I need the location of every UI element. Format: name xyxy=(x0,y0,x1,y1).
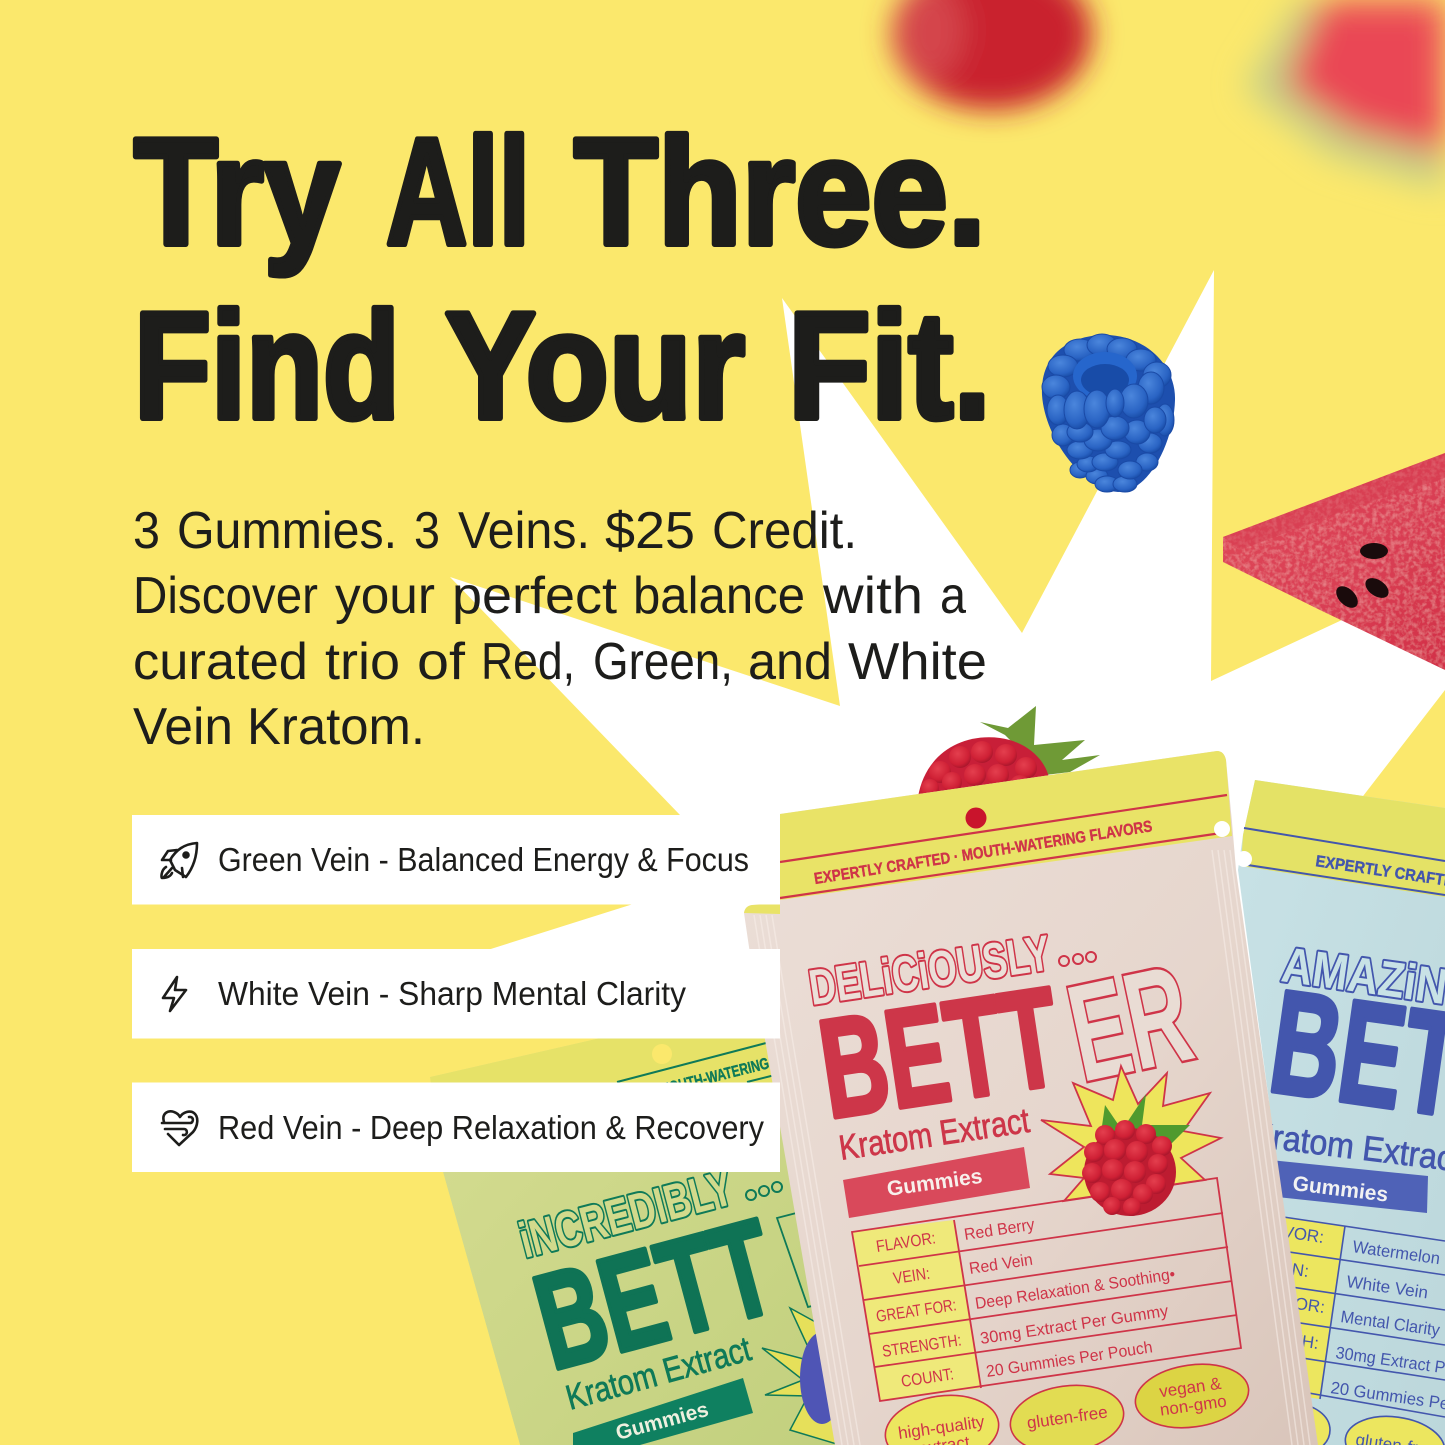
intro paragraph: and xyxy=(748,633,832,691)
tear notches xyxy=(1214,821,1230,837)
intro paragraph: Discover xyxy=(133,567,318,625)
red pouch band text: EXPERTLY CRAFTED · MOUTH-WATERING FLAVORS xyxy=(813,818,1154,888)
red pouch table: STRENGTH: xyxy=(881,1331,963,1361)
intro paragraph: $25 xyxy=(605,502,695,560)
white starburst xyxy=(440,270,1445,1120)
intro paragraph: Green, xyxy=(593,633,733,691)
icon: rocket xyxy=(161,843,197,878)
green pouch wordmark: iNCREDIBLY xyxy=(514,1160,739,1269)
title: Try xyxy=(134,107,340,277)
title xyxy=(134,107,991,451)
red pouch star burst xyxy=(1041,1066,1221,1201)
red pouch table: FLAVOR: xyxy=(875,1229,937,1256)
icon: lightning bolt xyxy=(163,977,186,1011)
title: All xyxy=(386,107,530,277)
red pouch: red vein: ER xyxy=(1056,936,1204,1111)
red pouch: red vein: Gummies xyxy=(885,1165,984,1201)
intro paragraph: Credit. xyxy=(712,502,857,560)
row: red vein xyxy=(132,1082,780,1172)
blue pouch table: Watermelon xyxy=(1351,1237,1441,1268)
blue pouch gummies bar xyxy=(1268,1160,1428,1213)
intro paragraph: Red, xyxy=(481,633,575,691)
blue pouch: white vein: Gummies xyxy=(1291,1172,1389,1207)
row text: White Vein - Sharp Mental Clarity xyxy=(218,975,686,1012)
row text: Green Vein - Balanced Energy & Focus xyxy=(218,841,749,878)
intro paragraph: Gummies. xyxy=(177,502,397,560)
title: Your xyxy=(445,281,745,451)
intro paragraph: Vein xyxy=(133,698,233,756)
red pouch table: COUNT: xyxy=(900,1365,955,1391)
raspberry behind red pouch xyxy=(918,706,1100,797)
row: white vein xyxy=(132,949,780,1038)
green pouch: green vein xyxy=(430,1038,835,1445)
blue raspberry xyxy=(1042,334,1175,492)
red pouch: red vein: Kratom Extract xyxy=(836,1101,1032,1168)
intro paragraph: balance xyxy=(633,567,805,625)
green pouch: green vein: Kratom Extract xyxy=(562,1329,755,1418)
green pouch star and blueberry xyxy=(762,1308,840,1445)
intro paragraph: White xyxy=(848,633,987,691)
red pouch: red vein: BETT xyxy=(810,957,1069,1148)
red pouch table: GREAT FOR: xyxy=(875,1296,958,1326)
intro paragraph: perfect xyxy=(452,567,618,625)
intro paragraph: trio xyxy=(325,633,400,691)
blue pouch table: STRENGTH: xyxy=(1220,1320,1320,1353)
red pouch gummies bar xyxy=(843,1147,1030,1218)
blue pouch table: VEIN: xyxy=(1263,1256,1310,1281)
blue pouch table xyxy=(1285,1216,1445,1418)
intro paragraph: a xyxy=(940,567,966,625)
row: green vein xyxy=(132,815,780,904)
blue pouch table: FLAVOR: xyxy=(1252,1218,1325,1247)
red pouch table: 20 Gummies Per Pouch xyxy=(985,1338,1154,1381)
title: Three. xyxy=(574,107,986,277)
intro paragraph: Kratom. xyxy=(247,698,425,756)
red pouch: red vein xyxy=(744,751,1318,1445)
green pouch gummies bar xyxy=(573,1378,753,1445)
red pouch table xyxy=(852,1178,1241,1401)
title: Find xyxy=(134,281,400,451)
blue pouch: white vein xyxy=(1220,780,1445,1445)
red pouch badges: gluten-free xyxy=(1026,1402,1109,1433)
row text: Red Vein - Deep Relaxation & Recovery xyxy=(218,1109,764,1146)
red pouch table: Deep Relaxation & Soothing• xyxy=(974,1265,1177,1313)
hang hole xyxy=(966,808,986,828)
blue pouch table: White Vein xyxy=(1345,1272,1429,1302)
intro paragraph xyxy=(133,502,987,756)
intro paragraph: with xyxy=(822,567,923,625)
blurred watermelon top right xyxy=(1245,0,1445,190)
pouch side ribbing xyxy=(754,850,1310,1445)
icon: heart with breeze xyxy=(162,1111,197,1145)
red pouch table: Red Vein xyxy=(968,1251,1034,1278)
green pouch: green vein: Gummies xyxy=(613,1398,711,1445)
red pouch badges: high-quality xyxy=(897,1412,986,1443)
green pouch band text: MOUTH-WATERING xyxy=(658,1055,771,1099)
red pouch badges xyxy=(881,1357,1253,1445)
blue pouch badges xyxy=(1342,1410,1445,1445)
intro paragraph: your xyxy=(335,567,435,625)
watermelon slice xyxy=(1223,453,1445,670)
title: Fit. xyxy=(788,281,991,451)
red pouch badges: vegan & xyxy=(1158,1374,1223,1401)
blue pouch table: Mental Clarity xyxy=(1339,1307,1442,1340)
green pouch: green vein: BETT xyxy=(520,1191,789,1398)
intro paragraph: 3 xyxy=(133,502,160,560)
intro paragraph: 3 xyxy=(414,502,440,560)
red pouch table: 30mg Extract Per Gummy xyxy=(979,1302,1170,1348)
red pouch table: Red Berry xyxy=(963,1216,1037,1244)
intro paragraph: curated xyxy=(133,633,308,691)
red pouch table: VEIN: xyxy=(892,1265,931,1288)
intro paragraph: Veins. xyxy=(458,502,590,560)
red pouch wordmark: DELiCiOUSLY xyxy=(805,925,1054,1016)
blue pouch table: GREAT FOR: xyxy=(1222,1284,1326,1317)
red raspberry on pouch xyxy=(1082,1094,1190,1216)
intro paragraph: of xyxy=(417,633,466,691)
blurred raspberry top xyxy=(892,0,1092,110)
red pouch badges: non-gmo xyxy=(1159,1391,1228,1420)
